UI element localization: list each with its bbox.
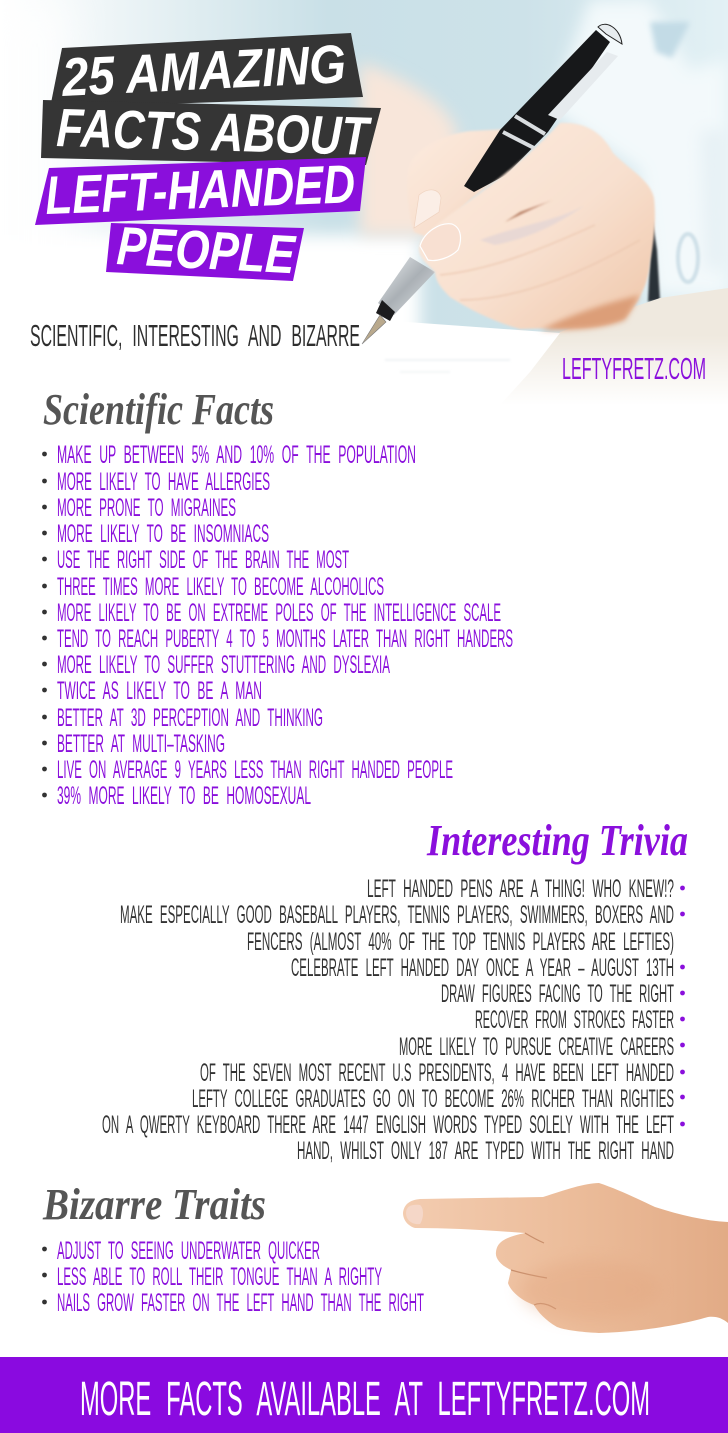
list: scientific facts: TWICE AS LIKELY TO BE A MAN (57, 677, 262, 705)
list: scientific facts (42, 441, 513, 810)
pen (362, 24, 622, 344)
table (500, 288, 728, 405)
blurred forearm (360, 62, 458, 235)
footer banner (0, 1357, 728, 1433)
list: scientific facts: BETTER AT MULTI–TASKING (57, 730, 225, 758)
title band: left-handed (35, 157, 366, 225)
subtitle: SCIENTIFIC, INTERESTING AND BIZARRE (30, 318, 360, 353)
title line 4: PEOPLE (115, 216, 298, 285)
title band: people (106, 223, 304, 281)
bottom fade of photo (0, 335, 728, 405)
title band: facts about (41, 100, 381, 165)
heading: scientific facts: Scientific Facts (43, 385, 274, 434)
title block (35, 33, 381, 285)
list: scientific facts: BETTER AT 3D PERCEPTION AND THINKING (57, 704, 323, 732)
title line 3: LEFT-HANDED (44, 154, 356, 226)
paper (330, 300, 560, 405)
list: bizarre traits: ADJUST TO SEEING UNDERWATER QUICKER (57, 1237, 320, 1265)
title line 2: FACTS ABOUT (56, 98, 372, 167)
list: scientific facts: MORE PRONE TO MIGRAINES (57, 494, 236, 522)
title band: 25 amazing (50, 33, 363, 108)
list: bizarre traits (42, 1237, 424, 1317)
thumb (407, 129, 520, 238)
list: interesting trivia (102, 875, 685, 1165)
icon: pointing hand (403, 1183, 728, 1333)
list: scientific facts: 39% MORE LIKELY TO BE HOMOSEXUAL (57, 782, 311, 810)
main hand (419, 123, 655, 329)
shirt sleeve (550, 0, 728, 302)
list: scientific facts: MORE LIKELY TO BE INSOMNIACS (57, 520, 269, 548)
header photo: hand writing with pen (0, 0, 728, 405)
list: scientific facts: USE THE RIGHT SIDE OF THE BRAIN THE MOST (57, 546, 349, 574)
heading: bizarre traits: Bizarre Traits (42, 1180, 266, 1229)
list: scientific facts: MORE LIKELY TO HAVE ALLERGIES (57, 468, 270, 496)
title line 1: 25 AMAZING (60, 34, 347, 108)
